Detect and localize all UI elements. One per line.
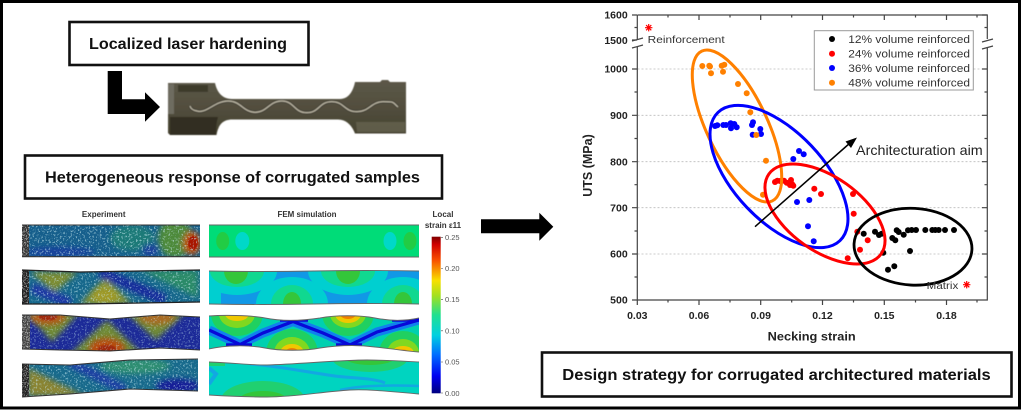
column title: Experiment: Experiment — [82, 210, 126, 219]
arrow: to chart — [481, 213, 553, 241]
y minor ticks — [634, 28, 637, 277]
FEM strip 1 — [209, 225, 419, 257]
ellipse: 24% cluster — [747, 144, 903, 284]
colorbar: 0.00 — [445, 389, 460, 398]
legend — [814, 31, 973, 90]
x tick labels: 0.18 — [936, 310, 957, 322]
FEM strip 4 — [209, 360, 419, 397]
experiment strip edges — [22, 225, 200, 397]
experiment strip 2 — [22, 270, 200, 304]
FEM strip 2 — [209, 271, 419, 304]
experiment strip 3 — [22, 316, 200, 350]
FEM strip 3 — [209, 316, 419, 352]
y tick labels: 700 — [610, 202, 628, 214]
x tick labels: 0.06 — [689, 310, 709, 322]
x tick labels: 0.09 — [750, 310, 771, 322]
y tick labels: 1500 — [604, 35, 628, 47]
ellipse: 12% cluster — [852, 205, 974, 288]
right ticks — [982, 15, 987, 277]
colorbar — [432, 233, 460, 398]
y tick labels: 1000 — [604, 64, 628, 76]
box: Design strategy — [542, 352, 1012, 396]
legend: 36% volume reinforced — [848, 63, 970, 75]
box: Heterogeneous response: Heterogeneous response of corrugated samples — [45, 169, 420, 186]
x tick labels — [627, 310, 957, 322]
x tick labels: 0.12 — [812, 310, 833, 322]
marker: Matrix — [927, 280, 970, 292]
y tick labels: 500 — [610, 295, 628, 307]
data: 24% volume reinforced — [772, 177, 871, 261]
colorbar title: strain ε11 — [425, 221, 462, 230]
legend: 48% volume reinforced — [848, 78, 970, 90]
y axis title: UTS (MPa) — [581, 134, 595, 197]
colorbar: 0.10 — [445, 326, 460, 336]
colorbar: 0.25 — [445, 233, 460, 242]
column title: FEM simulation: FEM simulation — [277, 210, 337, 219]
marker: Reinforcement: Reinforcement — [648, 34, 725, 46]
x tick labels: 0.15 — [874, 310, 895, 322]
label: Architecturation aim: Architecturation aim — [856, 142, 983, 158]
marker: Reinforcement — [645, 24, 725, 46]
axes — [632, 15, 993, 305]
ellipse: 36% cluster — [686, 82, 872, 271]
y tick labels: 1600 — [604, 10, 628, 22]
y major ticks — [632, 15, 637, 300]
x ticks — [637, 300, 977, 305]
grid lines — [638, 69, 987, 254]
box: Heterogeneous response — [25, 156, 442, 198]
box: Localized laser hardening: Localized laser hardening — [89, 36, 287, 53]
x axis title: Necking strain — [768, 330, 856, 344]
specimen photo — [168, 80, 406, 135]
arrow: bent arrow to specimen — [108, 71, 160, 122]
laser hardened wave — [190, 101, 398, 113]
y tick labels — [604, 10, 628, 307]
FEM strip edges — [209, 225, 419, 397]
experiment strip 1 — [22, 226, 200, 256]
data: 48% volume reinforced — [699, 62, 769, 198]
y tick labels: 600 — [610, 249, 628, 261]
colorbar: 0.05 — [445, 358, 460, 366]
chart: UTS vs necking strain — [581, 10, 993, 344]
dark patch on grip — [170, 117, 218, 135]
arrow: architecturation aim — [755, 138, 857, 227]
colorbar: 0.20 — [445, 264, 460, 273]
marker: Matrix: Matrix — [927, 280, 959, 292]
data: 12% volume reinforced — [861, 227, 957, 273]
colorbar title: Local — [433, 210, 453, 219]
top ticks — [668, 15, 977, 20]
x tick labels: 0.03 — [627, 310, 648, 322]
legend: 12% volume reinforced — [848, 34, 970, 46]
y tick labels: 800 — [610, 156, 628, 168]
y tick labels: 900 — [610, 110, 628, 122]
box: Design strategy: Design strategy for corrugated architectured materials — [562, 367, 991, 384]
data: 36% volume reinforced — [712, 119, 817, 244]
colorbar: 0.15 — [445, 295, 460, 304]
experiment strip 4 — [22, 358, 200, 398]
legend: 24% volume reinforced — [848, 49, 970, 61]
box: Localized laser hardening — [70, 22, 308, 65]
ellipse: 48% cluster — [674, 38, 800, 214]
